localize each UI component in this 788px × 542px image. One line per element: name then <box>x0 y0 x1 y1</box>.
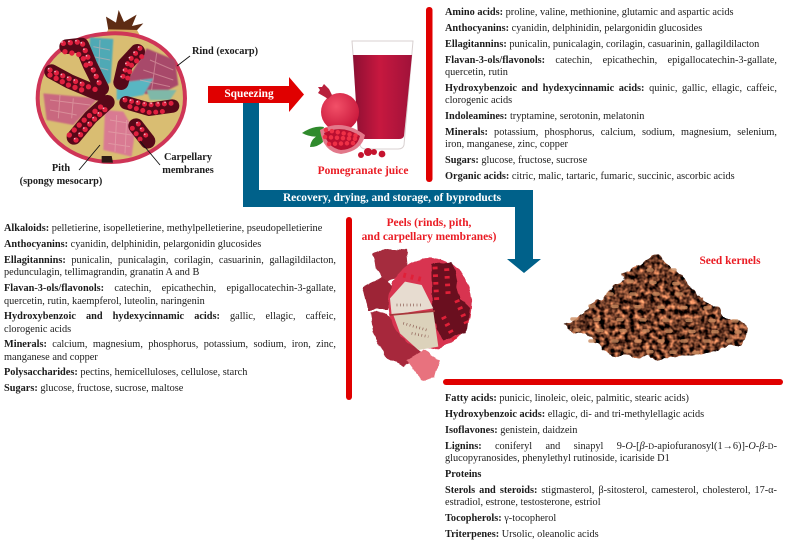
text block: juice composition: quercetin, rutin <box>445 67 508 78</box>
divider bar: seeds <box>443 379 783 385</box>
label: pith <box>20 163 102 187</box>
label: peels <box>362 217 496 243</box>
text block: seed composition: Sterols and steroids: stigmasterol, β-sitosterol, camesterol, cholesterol, 17-α- <box>445 485 777 496</box>
text block: peel composition: Polysaccharides: pectins, hemicelluloses, cellulose, starch <box>4 367 247 378</box>
text block: peel composition: quercetin, rutin, kaempferol, luteolin, naringenin <box>4 296 205 307</box>
illustration: pomegranate cross-section <box>38 10 185 163</box>
text block: seed composition: Fatty acids: punicic, linoleic, oleic, palmitic, stearic acids) <box>445 393 689 404</box>
squeezing arrow <box>208 77 304 112</box>
text block: seed composition: Tocopherols: γ-tocopherol <box>445 513 556 524</box>
label: peels: and carpellary membranes) <box>362 231 496 243</box>
illustration: glass of pomegranate juice with fruit <box>302 41 413 158</box>
text block: seed composition <box>445 393 777 540</box>
text block: seed composition: Hydroxybenzoic acids: ellagic, di- and tri-methylellagic acids <box>445 409 704 420</box>
text block: juice composition: clorogenic acids <box>445 95 512 106</box>
text block: seed composition: Triterpenes: Ursolic, oleanolic acids <box>445 529 599 540</box>
label: pomegranate juice: Pomegranate juice <box>318 165 408 177</box>
text block: juice composition: Organic acids: citric, malic, tartaric, fumaric, succinic, ascorbic acids <box>445 171 735 182</box>
label: pith: Pith <box>52 163 70 174</box>
text block: seed composition: Proteins <box>445 469 481 480</box>
text block: peel composition: Sugars: glucose, fructose, sucrose, maltose <box>4 383 183 394</box>
photo: peels <box>363 248 472 380</box>
text block: juice composition: Flavan-3-ols/flavonols: catechin, epicathechin, epigallocatechin-3-gallate, <box>445 55 777 66</box>
label: pith: (spongy mesocarp) <box>20 176 102 187</box>
recovery pathway arrow <box>243 103 541 273</box>
photo: seed kernels pile <box>562 253 748 358</box>
text block: peel composition <box>4 223 336 394</box>
text block: seed composition: glucopyranosides, phenylethyl rutinoside, icariside D1 <box>445 453 670 464</box>
label: peels: Peels (rinds, pith, <box>387 217 471 229</box>
text block: juice composition <box>445 7 777 182</box>
label: carpellary membranes <box>162 152 214 176</box>
label: seed kernels: Seed kernels <box>699 255 761 267</box>
text block: seed composition: Isoflavones: genistein, daidzein <box>445 425 577 436</box>
divider bar: peels <box>346 217 352 400</box>
text block: peel composition: Alkaloids: pelletierine, isopelletierine, methylpelletierine, pseudopelletierine <box>4 223 322 234</box>
text block: peel composition: Flavan-3-ols/flavonols: catechin, epicathechin, epigallocatechin-3-gallate, <box>4 283 336 294</box>
text block: juice composition: Minerals: potassium, phosphorus, calcium, sodium, magnesium, selenium, <box>445 127 777 138</box>
text block: peel composition: Minerals: calcium, magnesium, phosphorus, potassium, sodium, iron, zinc, <box>4 339 336 350</box>
text block: juice composition: Amino acids: proline, valine, methionine, glutamic and aspartic acids <box>445 7 734 18</box>
label: recovery step: Recovery, drying, and storage, of byproducts <box>283 192 501 204</box>
label: carpellary membranes: membranes <box>162 165 214 176</box>
label line: pith <box>79 145 100 170</box>
text block: seed composition: Lignins: coniferyl and sinapyl 9-O-[β-D-apiofuranosyl(1→6)]-O-β-D- <box>445 441 777 452</box>
divider bar: juice <box>426 7 432 182</box>
text block: juice composition: Sugars: glucose, fructose, sucrose <box>445 155 587 166</box>
text block: seed composition: estradiol, estrone, testosterone, estriol <box>445 497 601 508</box>
label: squeezing: Squeezing <box>224 88 274 100</box>
text block: juice composition: iron, manganese, zinc, copper <box>445 139 568 150</box>
text block: juice composition: Anthocyanins: cyanidin, delphinidin, pelargonidin glucosides <box>445 23 702 34</box>
text block: peel composition: clorogenic acids <box>4 324 71 335</box>
text block: juice composition: Ellagitannins: punicalin, punicalagin, corilagin, casuarinin, gallagildilacton <box>445 39 759 50</box>
label: rind: Rind (exocarp) <box>192 46 258 57</box>
text block: juice composition: Hydroxybenzoic and hydexycinnamic acids: quinic, gallic, ellagic, caffeic, <box>445 83 777 94</box>
label line: rind <box>177 56 190 66</box>
text block: juice composition: Indoleamines: tryptamine, serotonin, melatonin <box>445 111 644 122</box>
text block: peel composition: Anthocyanins: cyanidin, delphinidin, pelargonidin glucosides <box>4 239 261 250</box>
text block: peel composition: pedunculagin, tellimagrandin, granatin A and B <box>4 267 199 278</box>
label line: carpellary membranes <box>140 141 160 165</box>
text block: peel composition: Hydroxybenzoic and hydexycinnamic acids: gallic, ellagic, caffeic, <box>4 311 336 322</box>
text block: peel composition: manganese and copper <box>4 352 98 363</box>
text block: peel composition: Ellagitannins: punicalin, punicalagin, corilagin, casuarinin, gallagildilacton, <box>4 255 336 266</box>
label: carpellary membranes: Carpellary <box>164 152 212 163</box>
